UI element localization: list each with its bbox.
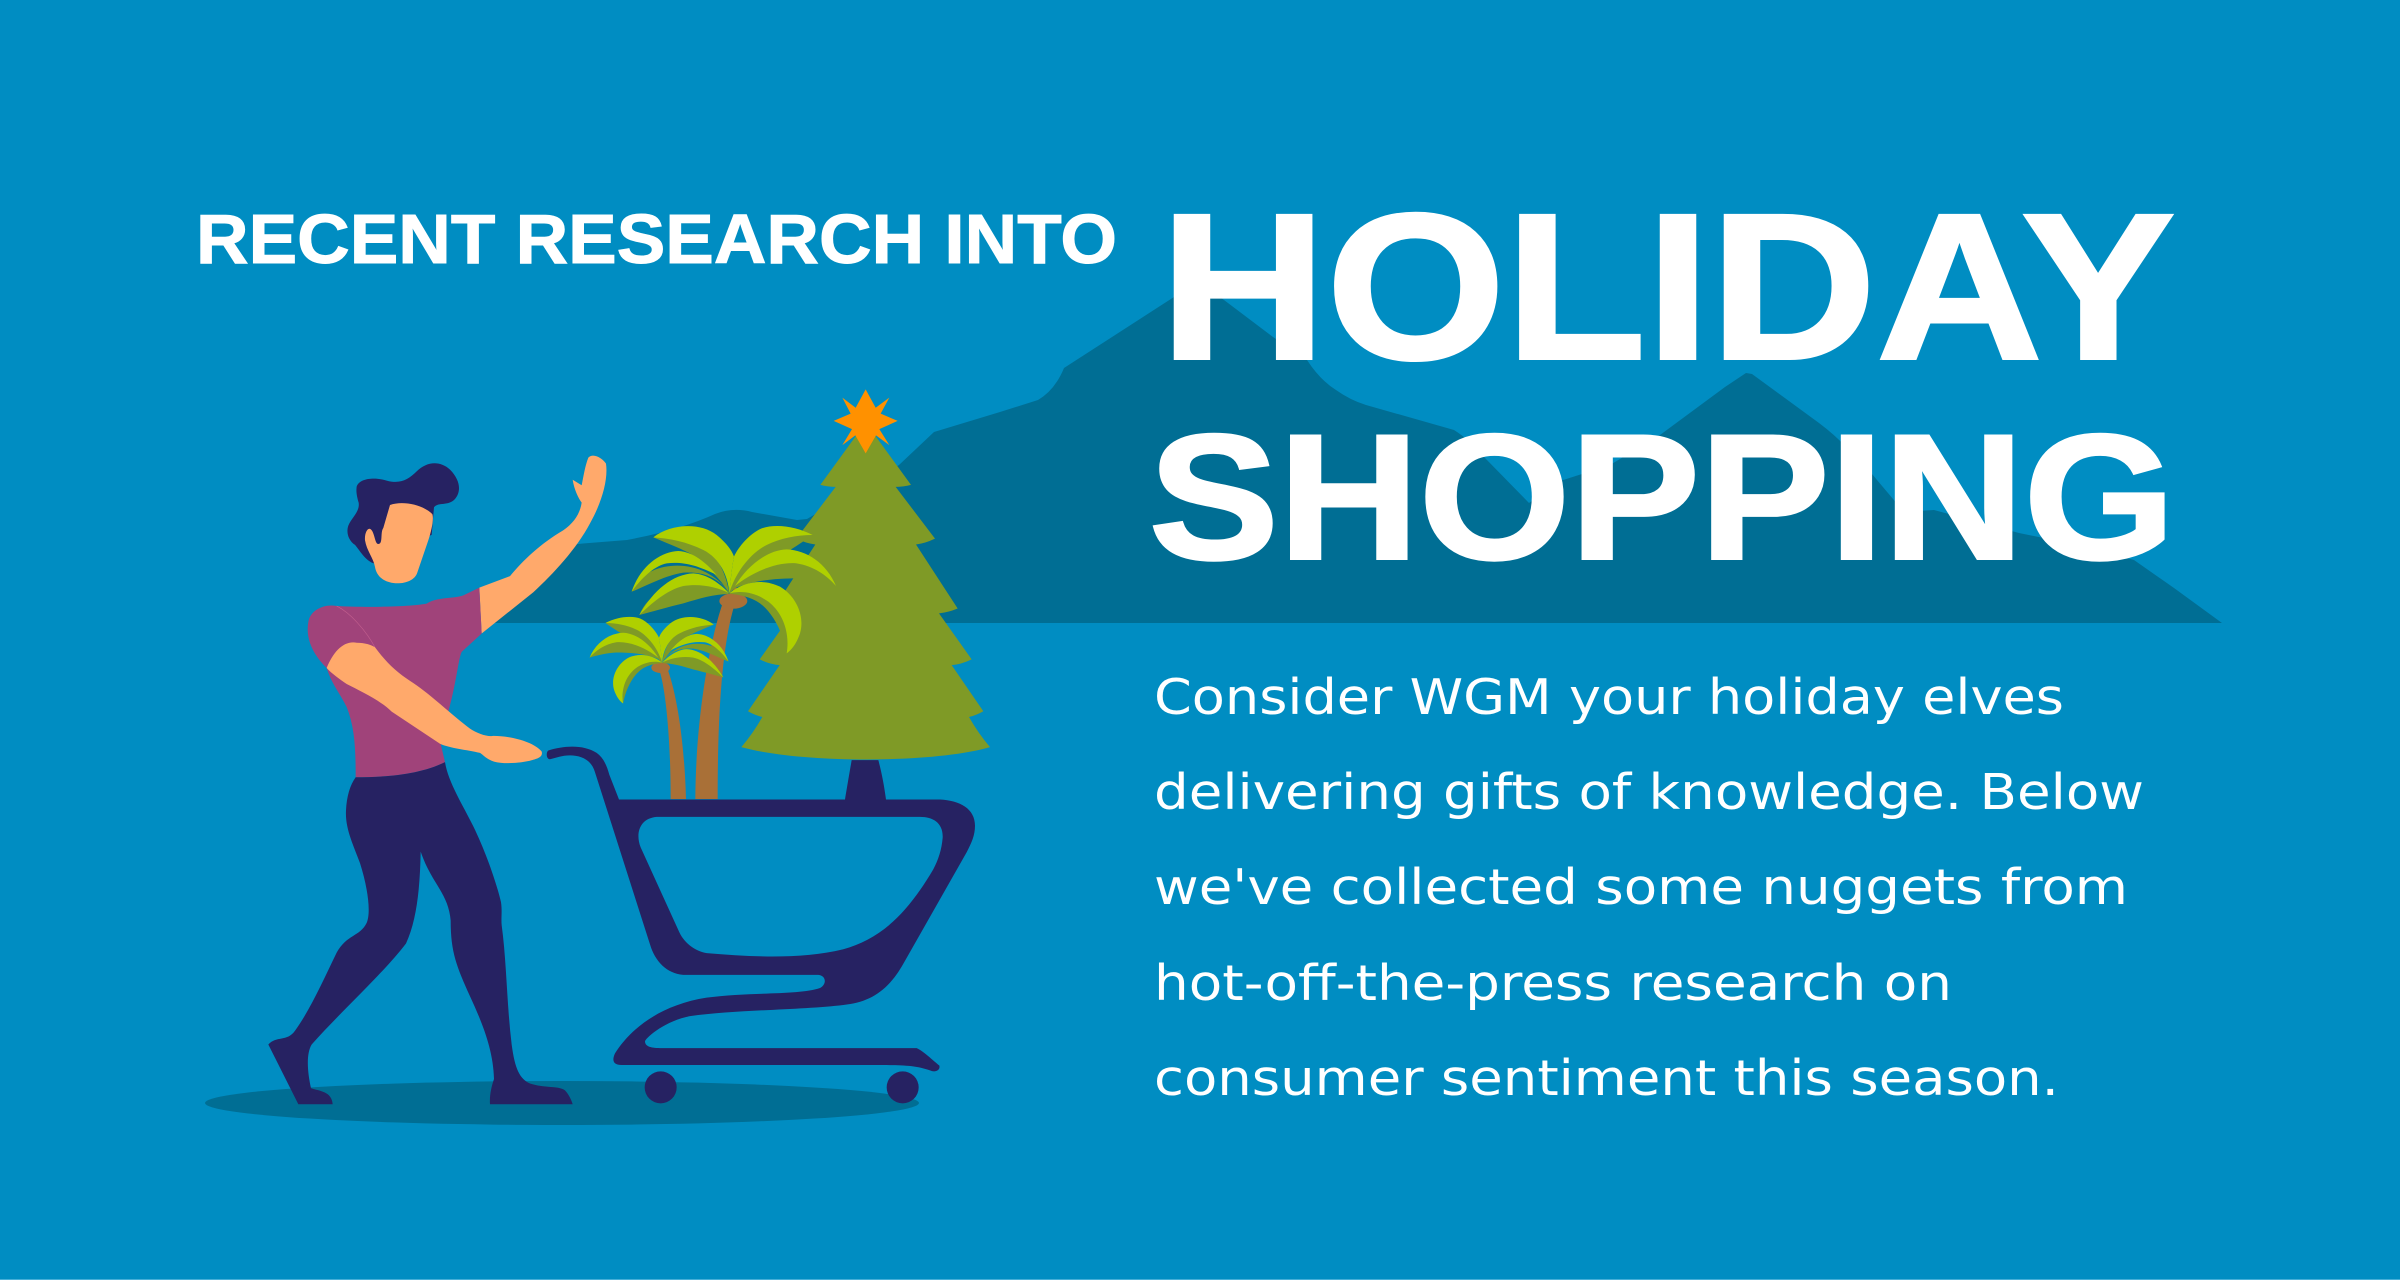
ground shadow — [205, 1081, 919, 1125]
heading: recent research into: RECENT RESEARCH INTO — [196, 200, 1117, 278]
body text: consumer sentiment this season. — [1154, 1050, 2059, 1107]
trousers — [268, 762, 573, 1104]
palm trunks — [651, 585, 747, 799]
raised arm — [479, 456, 606, 634]
illustration: shopper — [268, 456, 606, 1104]
body text — [1154, 669, 2144, 1107]
body text: delivering gifts of knowledge. Below — [1154, 764, 2144, 821]
shopping cart — [547, 747, 975, 1103]
cart body — [547, 747, 975, 1071]
title: holiday: HOLIDAY — [1160, 172, 2175, 404]
body text: Consider WGM your holiday elves — [1154, 669, 2064, 726]
body text: hot-off-the-press research on — [1154, 955, 1952, 1012]
christmas tree with star — [741, 389, 990, 759]
body text: we've collected some nuggets from — [1154, 859, 2128, 916]
tree — [741, 428, 990, 759]
star — [834, 389, 898, 453]
large palm leaves — [632, 526, 836, 653]
title: shopping: SHOPPING — [1149, 398, 2175, 596]
palm trees — [590, 526, 836, 799]
face — [365, 503, 433, 583]
mountains — [490, 281, 2222, 623]
shirt — [308, 588, 482, 777]
lower arm — [327, 642, 542, 763]
small palm leaves — [590, 617, 729, 703]
cart wheels — [645, 1071, 919, 1103]
hair — [347, 463, 459, 563]
